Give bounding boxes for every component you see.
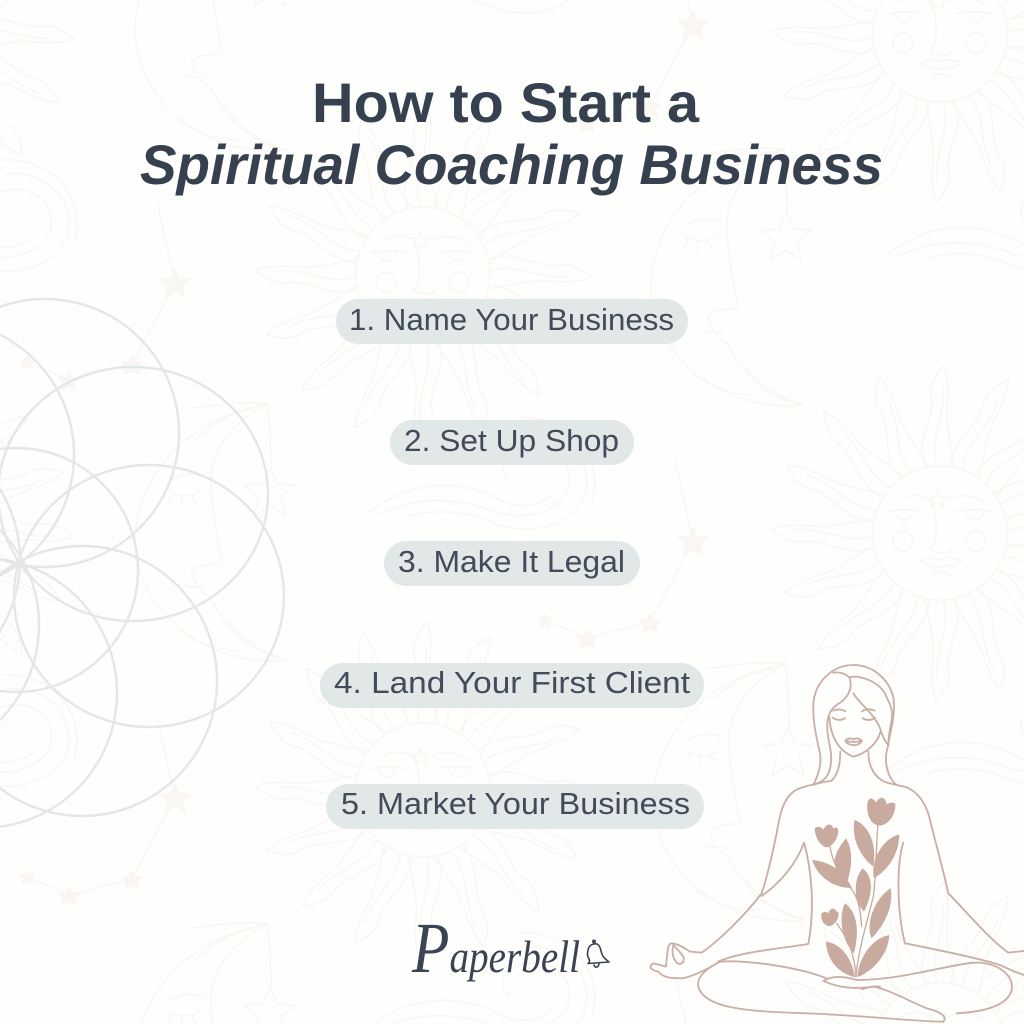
sacred geometry circles: [0, 299, 284, 828]
step 3 pill: 3. Make It Legal: [398, 544, 625, 579]
step 5 pill: 5. Market Your Business: [341, 786, 690, 821]
woman: hair and face: [813, 665, 897, 785]
meditating woman illustration: [651, 665, 1024, 1022]
icon: bell: [587, 940, 609, 967]
step 2 pill: [390, 420, 634, 465]
title: [140, 71, 883, 196]
step 2 pill: 2. Set Up Shop: [404, 423, 619, 458]
title line 2: Spiritual Coaching Business: [140, 133, 883, 196]
step 4 pill: [320, 663, 704, 708]
flower stems: [830, 823, 878, 977]
logo wordmark: Paperbell: [411, 908, 580, 988]
flower leaves and tulips: [812, 798, 899, 977]
step 1 pill: 1. Name Your Business: [349, 302, 674, 337]
step 4 pill: 4. Land Your First Client: [334, 665, 690, 700]
woman: body outline: [651, 780, 1024, 978]
step 3 pill: [384, 541, 640, 586]
woman: crossed legs: [698, 961, 1012, 1022]
Paperbell logo: [411, 908, 609, 988]
step 5 pill: [326, 784, 704, 829]
title line 1: How to Start a: [312, 71, 700, 134]
